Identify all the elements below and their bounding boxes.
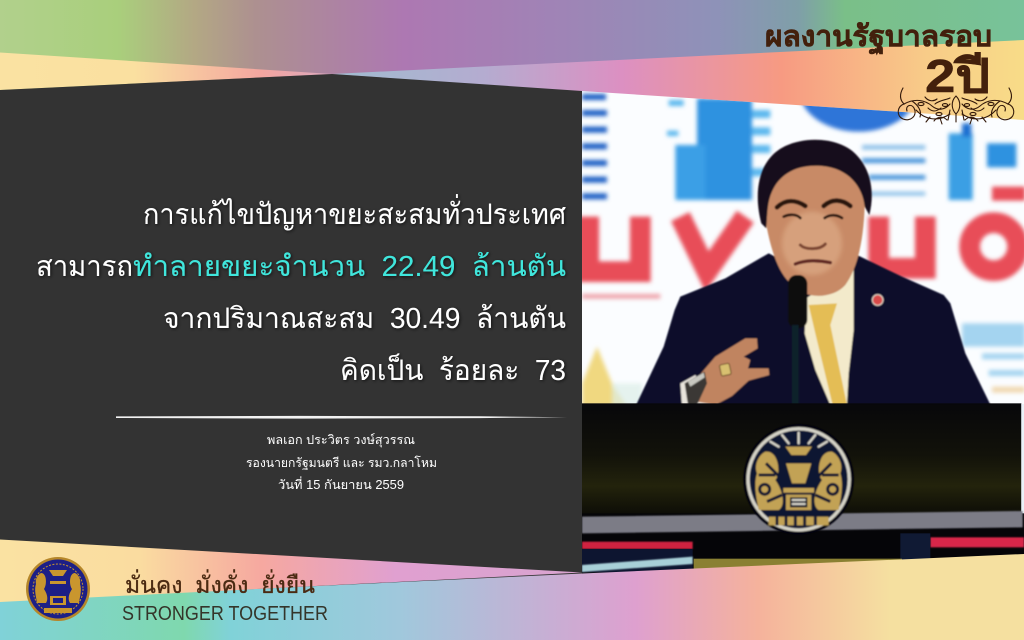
title heading (765, 21, 992, 102)
statement line 3: จากปริมาณสะสม 30.49 ล้านตัน (163, 303, 566, 335)
statement line 2 white part: สามารถ (36, 251, 133, 283)
statement line 4: คิดเป็น ร้อยละ 73 (340, 352, 566, 387)
background: left yellow wedge (0, 52, 332, 90)
speaker necktie (809, 303, 847, 405)
microphone (788, 275, 807, 328)
attribution name: พลเอก ประวิตร วงษ์สุวรรณ (267, 433, 415, 448)
background: right pink wedge (332, 40, 1024, 125)
attribution position: รองนายกรัฐมนตรี และ รมว.กลาโหม (246, 455, 437, 470)
speaker face (763, 157, 865, 296)
divider line (116, 416, 567, 419)
title 2 years: 2ปี (925, 50, 990, 102)
lapel pin (872, 295, 883, 305)
podium red strips (582, 542, 693, 549)
background: bottom gradient band (0, 554, 1024, 640)
ornament under title (898, 88, 1014, 124)
title line 1: ผลงานรัฐบาลรอบ (765, 21, 992, 55)
backdrop screen graphics (582, 48, 1024, 407)
main statement text (36, 194, 567, 387)
slogan english: STRONGER TOGETHER (122, 603, 328, 625)
speaker shirt (805, 267, 854, 405)
background: top gradient band (0, 0, 1024, 125)
backdrop golden chedi (582, 347, 627, 407)
photo: speaker at podium (582, 48, 1024, 580)
logo: government emblem (26, 557, 90, 621)
speaker jacket (635, 253, 991, 407)
background: bottom yellow-pink wedge (0, 540, 582, 602)
podium state seal (743, 424, 854, 535)
attribution text (246, 433, 437, 492)
backdrop red lettering (589, 217, 1018, 272)
slogan thai: มั่นคง มั่งคั่ง ยั่งยืน (125, 569, 315, 598)
statement line 2 highlight: ทำลายขยะจำนวน 22.49 ล้านตัน (133, 251, 566, 283)
speaker facial features (777, 201, 850, 264)
slogan (122, 569, 328, 625)
panel: dark text panel (0, 74, 582, 572)
podium (582, 403, 1024, 578)
speaker hair (758, 140, 872, 228)
speaker hand, cuff and watch (680, 375, 719, 406)
statement line 1: การแก้ไขปัญหาขยะสะสมทั่วประเทศ (143, 194, 567, 231)
attribution date: วันที่ 15 กันยายน 2559 (278, 476, 404, 492)
